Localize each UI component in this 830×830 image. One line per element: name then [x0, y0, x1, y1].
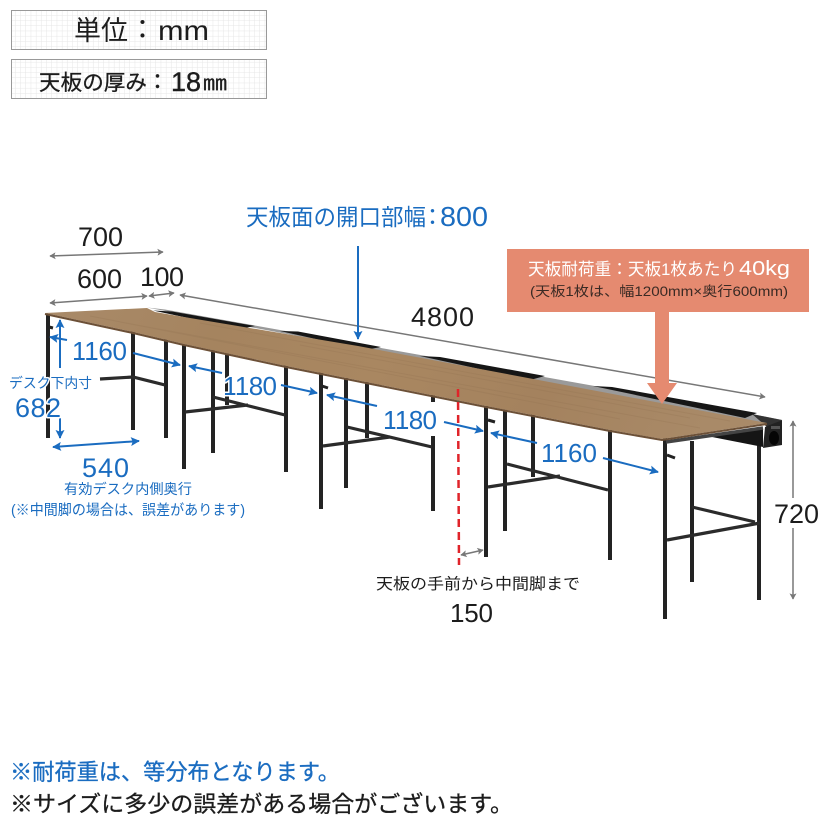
load capacity callout: (天板1枚は、幅1200mm×奥行600mm) — [530, 284, 788, 299]
tabletop thickness box: ： — [147, 71, 168, 94]
desk illustration — [45, 308, 782, 619]
footnote: load distribution: ※耐荷重は、等分布となります。 — [10, 760, 340, 785]
tabletop thickness box: 天板の厚み — [39, 70, 147, 95]
tabletop thickness box: 18 — [171, 67, 201, 97]
inner depth 540: 有効デスク内側奥行 — [64, 481, 192, 498]
span 1160 right: 1160 — [541, 438, 597, 468]
footnote: size tolerance: ※サイズに多少の誤差がある場合がございます。 — [10, 791, 513, 817]
load capacity callout: 天板耐荷重：天板1枚あたり — [528, 260, 737, 279]
dimension: 720: 720 — [774, 499, 819, 529]
span 1160 left: 1160 — [72, 336, 127, 366]
inner depth 540: 540 — [82, 453, 129, 483]
rear power box and apron — [666, 414, 782, 448]
tabletop thickness box — [12, 60, 266, 98]
span 1180 second — [189, 366, 317, 401]
load capacity callout: 40kg — [739, 258, 790, 280]
span 1180 second: 1180 — [223, 371, 277, 401]
under desk height 682: 682 — [15, 393, 61, 423]
inner depth 540 — [11, 441, 245, 519]
leg hooks — [49, 327, 675, 458]
under desk height 682: デスク下内寸 — [9, 375, 92, 391]
far opening strip — [147, 308, 782, 425]
opening width label and arrow — [246, 201, 488, 339]
dimension: 4800 — [180, 295, 765, 397]
dimension: 600: 600 — [77, 264, 122, 294]
inner depth 540: (※中間脚の場合は、誤差があります) — [11, 502, 245, 519]
unit box — [12, 10, 266, 50]
dimension: 700: 700 — [78, 222, 123, 252]
dimension: front edge to middle leg 150 — [376, 550, 580, 628]
legs and crossbars — [48, 314, 760, 619]
span 1180 third — [327, 395, 483, 435]
under desk height 682 — [9, 320, 92, 438]
dimension: 4800: 4800 — [411, 302, 474, 332]
opening width label and arrow: 800 — [440, 201, 488, 232]
red dashed guide line — [458, 389, 459, 565]
unit box: mm — [158, 15, 209, 46]
dimension: 600 — [50, 264, 147, 303]
wooden tabletop — [45, 308, 767, 440]
dimension: front edge to middle leg 150: 150 — [450, 598, 493, 628]
span 1160 left — [50, 336, 180, 366]
unit box: ： — [129, 15, 156, 45]
opening width label and arrow: 天板面の開口部幅 — [246, 204, 426, 230]
dimension: front edge to middle leg 150: 天板の手前から中間脚まで — [376, 575, 580, 593]
span 1160 right — [491, 433, 658, 472]
opening width label and arrow: ： — [421, 204, 444, 230]
unit box: 単位 — [74, 16, 128, 46]
dimension: 100: 100 — [140, 262, 184, 292]
span 1180 third: 1180 — [383, 405, 437, 435]
load capacity callout — [507, 249, 809, 404]
tabletop thickness box: ㎜ — [203, 72, 227, 95]
dimension: 700 — [50, 222, 163, 256]
